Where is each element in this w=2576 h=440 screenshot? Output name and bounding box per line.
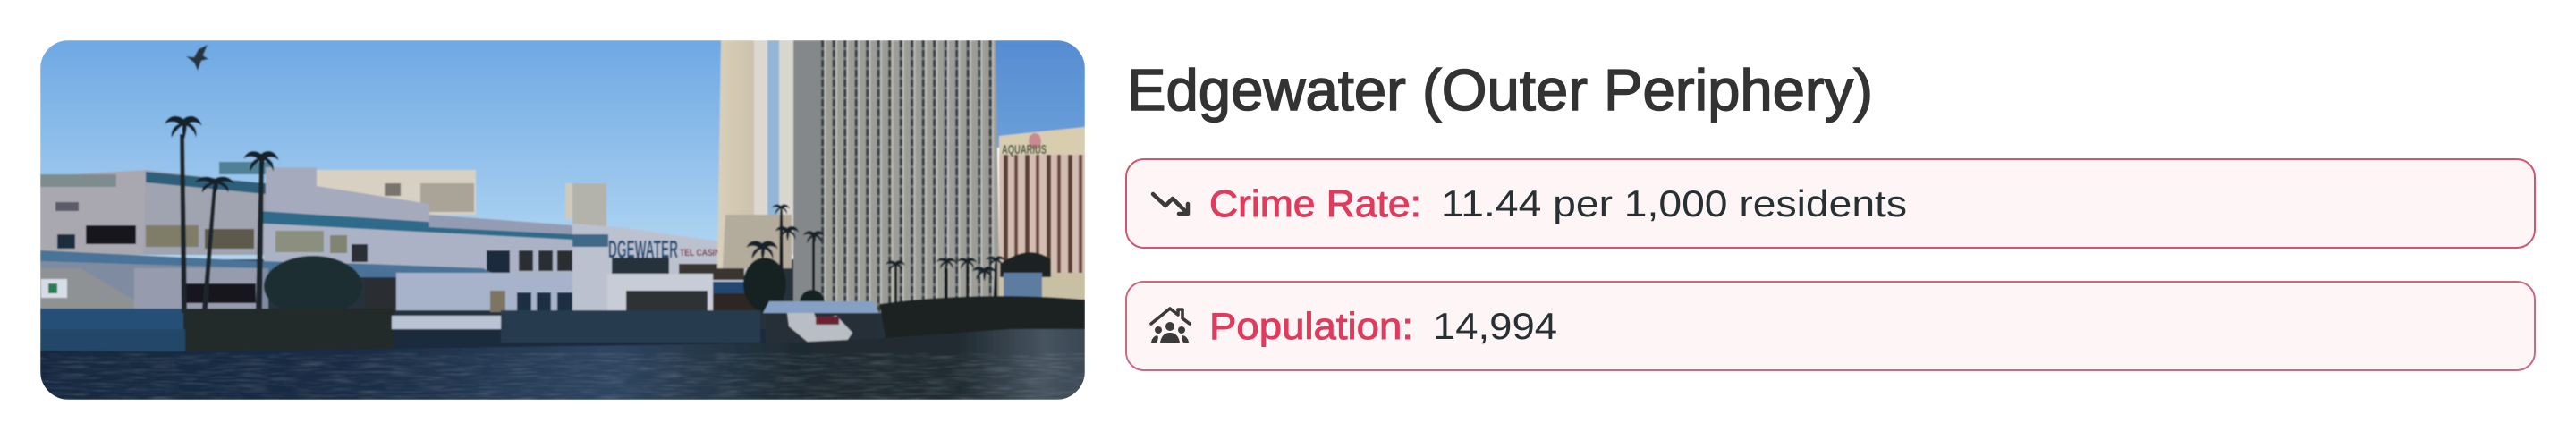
boat house and boat xyxy=(763,301,879,345)
bird xyxy=(186,45,208,71)
photo: Edgewater hotel and casino on the riverfront xyxy=(40,40,1085,400)
panel: neighbourhood details xyxy=(1125,57,2536,371)
central casino block xyxy=(259,167,572,277)
right casino facade with sign: TEL CASINO xyxy=(680,248,726,258)
left casino wing xyxy=(40,162,273,255)
high-rise tower xyxy=(717,40,1000,317)
value: population: 14,994 xyxy=(1433,305,1557,347)
icon: house with people xyxy=(1151,309,1190,343)
base behind the waterfront xyxy=(40,259,1085,367)
label: crime rate: Crime Rate: xyxy=(1209,182,1421,224)
right casino facade with sign xyxy=(572,183,773,313)
balcony and lower storey xyxy=(40,250,572,331)
icon: trending down arrow xyxy=(1153,194,1188,214)
back hotel building xyxy=(317,170,572,219)
value: crime rate: 11.44 per 1,000 residents xyxy=(1441,182,1907,224)
Aquarius hotel: AQUARIUS xyxy=(1002,142,1046,157)
shoreline xyxy=(40,296,1085,353)
sky xyxy=(40,40,1085,264)
Aquarius hotel xyxy=(999,127,1085,300)
card: population xyxy=(1126,282,2535,370)
right casino facade with sign: DGEWATER xyxy=(608,235,678,263)
river water xyxy=(40,329,1085,400)
palm trees xyxy=(165,116,1051,315)
label: population: Population: xyxy=(1209,305,1413,347)
heading: Edgewater (Outer Periphery) xyxy=(1127,57,1873,123)
card: crime rate xyxy=(1126,159,2535,248)
